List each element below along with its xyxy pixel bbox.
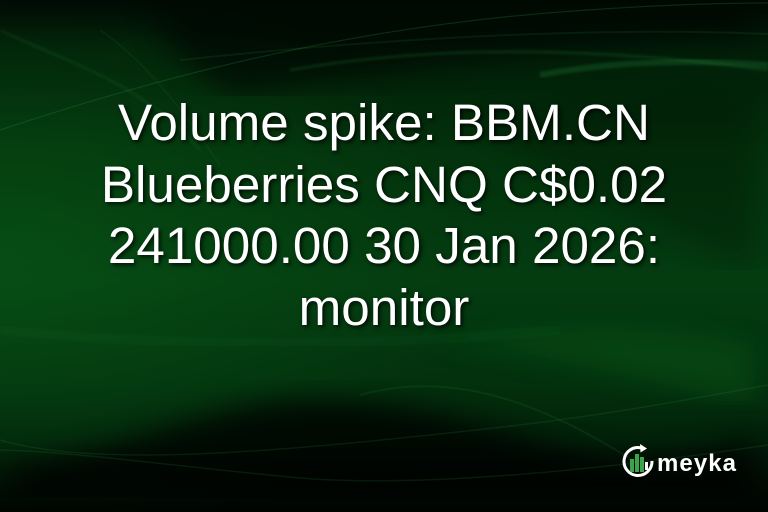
title: monitor (299, 278, 469, 336)
icon: ring with green bars (624, 444, 652, 475)
title (101, 94, 668, 336)
title: 241000.00 30 Jan 2026: (108, 217, 660, 274)
logo: meyka (622, 444, 737, 477)
title: Volume spike: BBM.CN (118, 94, 650, 151)
title: Blueberries CNQ C$0.02 (101, 156, 667, 212)
wordmark: meyka (657, 450, 737, 477)
